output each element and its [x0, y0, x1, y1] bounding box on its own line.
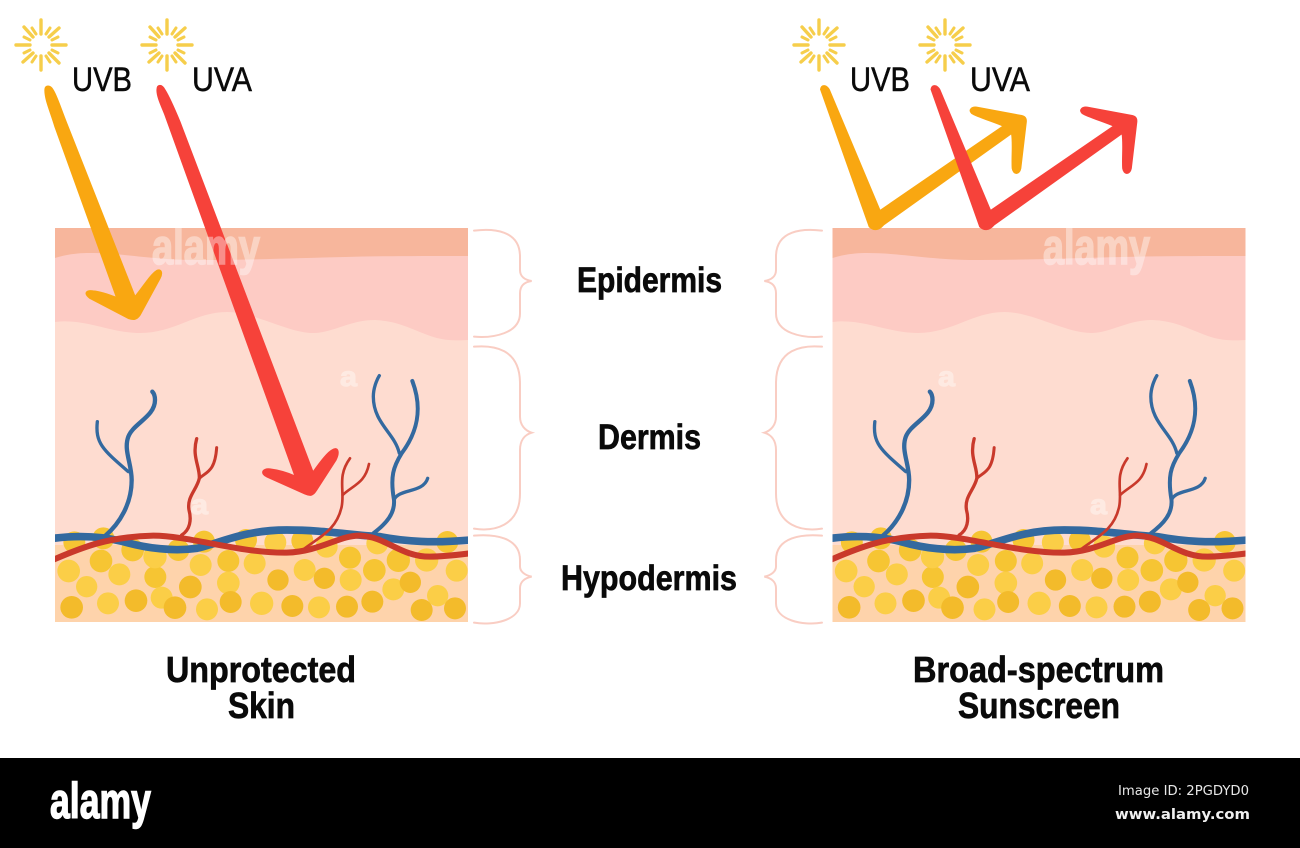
label: UVA right: UVA	[970, 61, 1030, 99]
panel: broad-spectrum sunscreen	[794, 20, 1247, 726]
watermarks: alamy	[152, 219, 260, 275]
watermarks: alamy	[1043, 219, 1150, 275]
arrow: UVA reflected	[931, 86, 1137, 229]
sun icon: UVB left	[16, 20, 66, 70]
sun icon: UVA right	[920, 20, 970, 70]
skin cross-section: right	[831, 228, 1247, 622]
arrow: UVA penetrates dermis	[157, 86, 338, 495]
label: UVB right: UVB	[850, 61, 910, 99]
brackets: right	[764, 230, 822, 624]
image id: Image ID: 2PGDYD0	[1118, 783, 1249, 799]
label: UVA left: UVA	[192, 61, 252, 99]
watermarks	[152, 219, 1150, 520]
footer logo: alamy	[50, 773, 151, 829]
footer bar	[0, 758, 1300, 848]
panel: unprotected skin	[16, 20, 470, 726]
caption: unprotected skin: Unprotected	[166, 649, 356, 690]
layer labels with brackets	[474, 230, 822, 624]
watermarks: a	[340, 361, 357, 392]
arrow: UVB penetrates epidermis	[45, 86, 161, 319]
label: Hypodermis: Hypodermis	[561, 559, 737, 598]
label: Dermis: Dermis	[598, 418, 701, 457]
watermarks: a	[1090, 489, 1107, 520]
footer url: www.alamy.com	[1115, 807, 1250, 823]
label: Epidermis: Epidermis	[577, 261, 722, 300]
sun icon: UVA left	[142, 20, 192, 70]
skin cross-section: left	[53, 228, 470, 622]
watermarks: a	[938, 361, 955, 392]
arrow: UVB reflected	[821, 86, 1026, 229]
brackets: left	[474, 230, 532, 624]
sun icon: UVB right	[794, 20, 844, 70]
label: UVB left: UVB	[72, 61, 132, 99]
caption: broad-spectrum sunscreen: Broad-spectrum	[913, 649, 1164, 690]
watermarks: a	[191, 489, 208, 520]
caption: unprotected skin: Skin	[228, 685, 295, 726]
caption: broad-spectrum sunscreen: Sunscreen	[958, 685, 1120, 726]
